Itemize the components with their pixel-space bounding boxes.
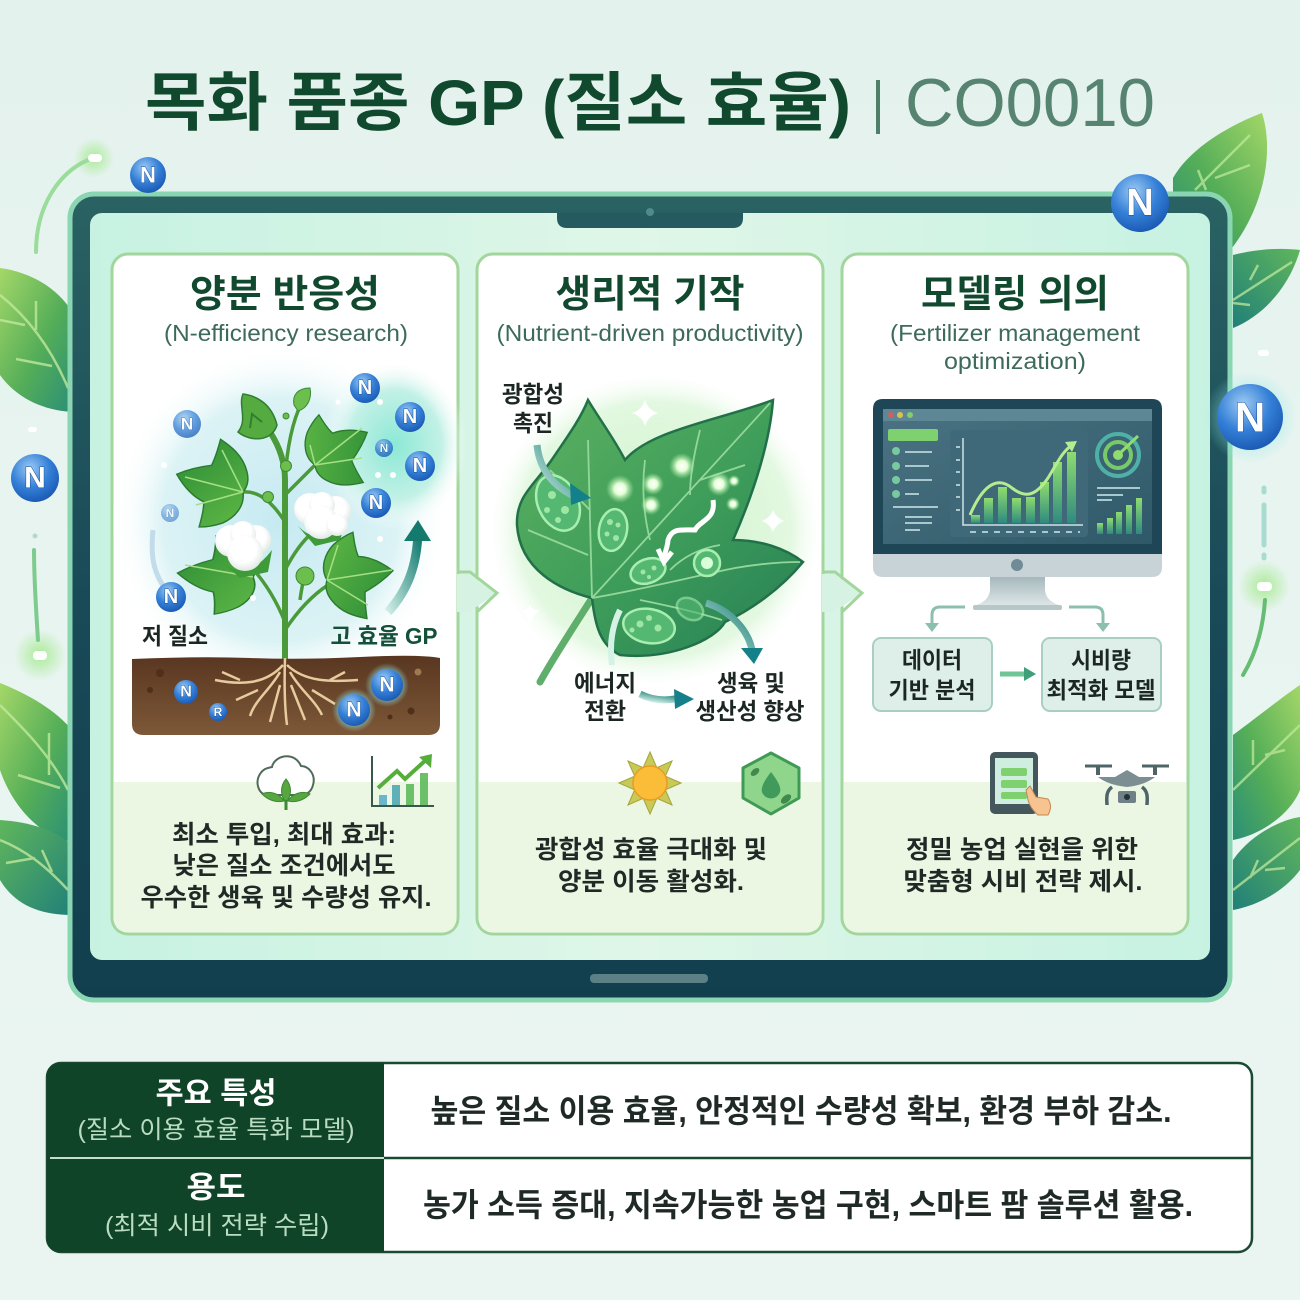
icon: cotton	[258, 756, 314, 810]
decorative trails	[14, 138, 1290, 681]
body text: 낮은 질소 조건에서도	[172, 852, 396, 880]
heading: 양분 반응성	[190, 274, 380, 316]
icon: sun	[619, 752, 681, 814]
tablet frame	[70, 194, 1230, 1000]
floating nitrogen icons: N	[1235, 394, 1265, 440]
labels	[502, 381, 804, 724]
row: uses: 농가 소득 증대, 지속가능한 농업 구현, 스마트 팜 솔루션 활용.	[423, 1187, 1193, 1223]
title	[145, 65, 1155, 141]
decorative leaves right	[1173, 113, 1300, 910]
body text: 양분 이동 활성화.	[558, 868, 744, 896]
subtitle: (Nutrient-driven productivity)	[496, 320, 804, 346]
icon: tablet	[990, 752, 1050, 815]
row: uses: 용도	[186, 1172, 246, 1204]
nitrogen particles: N	[369, 492, 383, 514]
nitrogen particles: R	[214, 705, 223, 719]
panel: modeling significance	[842, 254, 1188, 934]
box: data analysis	[873, 638, 992, 711]
box: fertilizer model	[1042, 638, 1161, 711]
top bud	[238, 394, 277, 439]
body text: 맞춤형 시비 전략 제시.	[904, 868, 1142, 896]
nitrogen particles: N	[358, 377, 372, 399]
arrow	[1000, 667, 1036, 681]
row: key traits: 높은 질소 이용 효율, 안정적인 수량성 확보, 환경 부하 감소.	[430, 1093, 1172, 1129]
heading: 생리적 기작	[556, 274, 744, 316]
chloroplasts	[528, 468, 720, 647]
row: key traits	[78, 1078, 1172, 1144]
sparkles	[520, 400, 784, 624]
icon: drone	[1085, 766, 1169, 805]
cotton bolls	[215, 492, 351, 578]
body text: 최소 투입, 최대 효과:	[172, 821, 396, 849]
growth arrow	[152, 399, 431, 612]
labels: 광합성	[502, 381, 564, 407]
row: key traits: (질소 이용 효율 특화 모델)	[78, 1116, 354, 1144]
decorative leaves left	[0, 268, 72, 915]
labels: 촉진	[513, 410, 553, 436]
nitrogen particles: N	[346, 698, 362, 722]
nitrogen particles: N	[181, 414, 193, 434]
icon: plant cell	[743, 753, 799, 814]
floating nitrogen icons: N	[24, 462, 46, 494]
nitrogen particles: N	[413, 455, 427, 477]
nitrogen particles: N	[403, 406, 417, 428]
subtitle: optimization)	[944, 348, 1086, 374]
body text: 우수한 생육 및 수량성 유지.	[140, 884, 432, 912]
monitor dashboard	[873, 399, 1162, 610]
leaf illustration	[485, 370, 825, 690]
body text: 정밀 농업 실현을 위한	[906, 836, 1138, 864]
labels: 생육 및	[717, 670, 785, 696]
nitrogen particles: N	[180, 684, 192, 700]
nitrogen particles	[156, 373, 435, 732]
subtitle: (N-efficiency research)	[164, 320, 408, 346]
arrow: panel 1 to 2	[457, 572, 497, 612]
arrows	[537, 445, 763, 709]
nitrogen particles: N	[379, 674, 395, 696]
icon: growth chart	[372, 754, 434, 806]
body text	[535, 836, 767, 896]
nitrogen particles: N	[166, 506, 174, 520]
labels: 전환	[584, 698, 626, 724]
cotton plant illustration	[112, 345, 467, 695]
arrow: panel 2 to 3	[822, 572, 862, 612]
subtitle	[890, 320, 1141, 374]
labels	[142, 623, 438, 649]
box: fertilizer model: 시비량	[1071, 647, 1131, 673]
labels: 생산성 향상	[696, 698, 804, 724]
body text: 광합성 효율 극대화 및	[535, 836, 767, 864]
heading: 모델링 의의	[921, 274, 1109, 316]
title: 목화 품종 GP (질소 효율)	[145, 67, 851, 139]
labels: 에너지	[574, 670, 636, 696]
row: uses	[105, 1172, 1193, 1240]
title: CO0010	[905, 65, 1155, 141]
body text	[904, 836, 1142, 896]
box: data analysis: 데이터	[902, 647, 962, 673]
floating nitrogen icons: N	[1126, 182, 1154, 224]
subtitle: (Fertilizer management	[890, 320, 1141, 346]
labels: 고 효율 GP	[330, 623, 438, 649]
box: fertilizer model: 최적화 모델	[1046, 677, 1156, 703]
summary table	[47, 1063, 1252, 1252]
row: key traits: 주요 특성	[156, 1078, 276, 1110]
floating nitrogen icons	[11, 157, 1296, 502]
soil and roots	[132, 656, 440, 735]
box: data analysis: 기반 분석	[888, 677, 976, 703]
nitrogen particles: N	[164, 586, 178, 608]
labels: 저 질소	[142, 623, 208, 649]
nitrogen particles: N	[380, 441, 388, 455]
body text	[140, 821, 432, 912]
panel: nutrient response	[112, 254, 467, 934]
panel: physiological mechanism	[477, 254, 825, 934]
floating nitrogen icons: N	[140, 162, 156, 188]
energy zigzag	[658, 500, 713, 562]
glow spots	[606, 453, 740, 515]
row: uses: (최적 시비 전략 수립)	[105, 1212, 329, 1240]
connector arrows	[925, 607, 1110, 632]
